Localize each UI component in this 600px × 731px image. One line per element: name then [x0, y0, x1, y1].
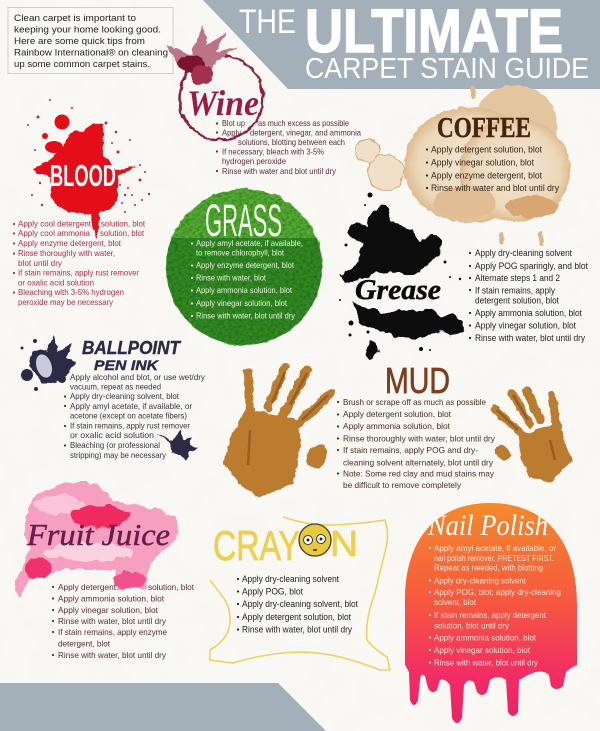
juice tips: solution, blot	[148, 582, 195, 592]
crayon tips: Apply dry-cleaning solvent	[242, 574, 339, 584]
grease tips: Rinse with water, blot until dry	[475, 333, 585, 343]
grass tips: Apply vinegar solution, blot	[196, 298, 288, 308]
footer band	[0, 683, 326, 731]
wine tips: as much excess as possible	[258, 118, 349, 128]
grease tips: detergent solution, blot	[475, 296, 559, 306]
right handprint	[493, 391, 571, 481]
panel: nail polish	[405, 503, 577, 723]
crayon title: N	[330, 523, 358, 564]
crayon tips: Rinse with water, blot until dry	[242, 624, 352, 634]
ink tips: vacuum, repeat as needed	[70, 382, 161, 392]
title: THE	[239, 3, 296, 41]
coffee tips: Apply enzyme detergent, blot	[431, 170, 542, 180]
panel: wine	[166, 25, 361, 176]
polish tips: Apply dry-cleaning solvent	[434, 576, 527, 586]
wine tips: detergent, vinegar, and ammonia	[250, 128, 361, 138]
polish dome with drips	[405, 503, 577, 723]
blood title: BLOOD	[50, 158, 116, 193]
crayon tips: Apply dry-cleaning solvent, blot	[242, 599, 358, 609]
ink tips: or oxalic acid solution	[70, 430, 154, 440]
panel: grass	[165, 189, 323, 348]
coffee tips	[427, 144, 559, 193]
wine tips: Rinse with water and blot until dry	[222, 166, 337, 176]
wine tips	[217, 118, 361, 176]
blood tips: peroxide may be necessary	[18, 297, 114, 307]
coffee tips: Apply detergent solution, blot	[431, 144, 542, 154]
crayon title: CRAY	[213, 522, 300, 569]
polish tips: solvent, blot	[434, 597, 477, 607]
mud tips	[338, 397, 496, 490]
ink tips: acetone (except on acetate fibers)	[70, 410, 187, 420]
polish tips: Apply vinegar solution, blot	[434, 645, 531, 655]
polish title: Nail Polish	[427, 509, 548, 542]
ink title: PEN INK	[94, 357, 159, 373]
wine stain ring and splash	[166, 25, 263, 140]
blood tips: blot until dry	[18, 258, 63, 268]
grass tips: to remove chlorophyll, blot	[196, 248, 285, 258]
grass tips: Rinse with water, blot until dry	[196, 310, 296, 320]
polish tips: Repeat as needed, with blotting	[434, 562, 543, 572]
juice title: Fruit Juice	[26, 517, 170, 552]
grease tips: Apply vinegar solution, blot	[475, 320, 576, 330]
wine tips: Blot up	[222, 118, 245, 128]
grass tips: Apply ammonia solution, blot	[196, 285, 293, 295]
panel: ballpoint pen ink	[20, 334, 206, 461]
grease tips: Alternate steps 1 and 2	[475, 273, 560, 283]
mud tips: be difficult to remove completely	[343, 480, 462, 490]
wine title: Wine	[187, 83, 259, 123]
coffee tips: Rinse with water and blot until dry	[431, 183, 559, 193]
crayon tips: Apply detergent solution, blot	[242, 612, 351, 622]
crayon tips	[238, 574, 358, 634]
panel: blood	[14, 99, 150, 307]
blood tips: solution, blot	[100, 228, 145, 238]
blood tips: solution, blot	[101, 218, 146, 228]
mud tips: If stain remains, apply POG and dry-	[343, 445, 478, 455]
juice tips: Apply ammonia solution, blot	[58, 594, 165, 604]
blood splat	[27, 99, 150, 240]
panel: grease	[338, 192, 588, 359]
ink tips: stripping) may be necessary	[70, 450, 167, 460]
panel: crayon	[210, 517, 390, 670]
mud tips: Rinse thoroughly with water, blot until dry	[343, 434, 496, 444]
blood tips: Apply cool ammonia	[18, 228, 90, 238]
grease tips: Apply ammonia solution, blot	[475, 308, 582, 318]
grass tips	[192, 238, 303, 320]
mud tips: Apply ammonia solution, blot	[343, 421, 451, 431]
grease tips: Apply POG sparingly, and blot	[475, 261, 588, 271]
ink title	[82, 338, 182, 373]
ink tips: Apply amyl acetate, if available, or	[70, 401, 192, 411]
ink tips	[65, 372, 206, 460]
coffee stain	[355, 85, 571, 245]
mud tips: Apply detergent solution, blot	[343, 409, 452, 419]
coffee tips: Apply vinegar solution, blot	[431, 158, 534, 168]
grass tips: Apply amyl acetate, if available,	[196, 238, 303, 248]
ink title: BALLPOINT	[82, 338, 182, 358]
grease splat	[338, 192, 463, 359]
panel: coffee	[355, 85, 571, 245]
left handprint	[224, 367, 331, 496]
juice splash	[13, 481, 178, 596]
juice tips: Apply vinegar solution, blot	[58, 605, 159, 615]
header banner	[203, 0, 600, 89]
intro text box: Rainbow International® on cleaning	[14, 48, 168, 58]
blood tips: Rinse thoroughly with water,	[18, 248, 115, 258]
panel: fruit juice	[13, 481, 195, 660]
juice tips: Rinse with water, blot until dry	[58, 616, 167, 626]
panel: mud	[224, 360, 571, 496]
grease tips	[470, 248, 588, 343]
polish tips	[430, 543, 561, 668]
ink tips: If stain remains, apply rust remover	[70, 420, 190, 430]
polish tips: If stain remains, apply detergent	[434, 610, 547, 620]
panel: grass: GRASS	[205, 195, 282, 246]
grease tips: Apply dry-cleaning solvent	[475, 248, 572, 258]
mud title: MUD	[385, 360, 450, 401]
crayon tips: Apply POG, blot	[242, 586, 303, 596]
small ink splat	[156, 430, 198, 461]
title	[239, 0, 589, 85]
grass tips: Apply enzyme detergent, blot	[196, 260, 295, 270]
wine tips: Apply	[222, 128, 242, 138]
blood tips	[14, 218, 146, 307]
polish tips: Apply POG, blot; apply dry-cleaning	[434, 587, 561, 597]
icon: shocked crayon face	[299, 524, 331, 556]
juice tips: Rinse with water, blot until dry	[58, 650, 167, 660]
intro text box: up some common carpet stains.	[14, 59, 150, 70]
mud tips: Brush or scrape off as much as possible	[343, 397, 486, 407]
blood tips: Apply cool detergent	[18, 218, 92, 228]
blood tips: If stain remains, apply rust remover	[18, 268, 139, 278]
polish tips: Rinse with water, blot until dry	[434, 658, 539, 668]
intro text box: Here are some quick tips from	[14, 36, 145, 47]
intro text box	[8, 8, 173, 74]
blood tips: Bleaching with 3-5% hydrogen	[18, 287, 124, 297]
wine tips: hydrogen peroxide	[222, 156, 286, 166]
juice tips	[53, 582, 195, 660]
intro text box: Clean carpet is important to	[14, 13, 136, 24]
ink tips: Apply alcohol and blot, or use wet/dry	[70, 372, 206, 382]
juice tips: detergent, blot	[58, 638, 111, 648]
polish tips: solution, blot until dry	[434, 620, 510, 630]
mud tips: cleaning solvent alternately, blot until dry	[343, 458, 494, 468]
blood tips: Apply enzyme detergent, blot	[18, 238, 122, 248]
polish tips: nail polish remover. PRETEST FIRST.	[434, 553, 554, 563]
blood tips: or oxalic acid solution	[18, 278, 94, 288]
juice tips: Apply detergent	[58, 582, 117, 592]
ink tips: Bleaching (or professional	[70, 440, 160, 450]
grass tips: Rinse with water, blot	[196, 272, 267, 282]
intro text box: keeping your home looking good.	[14, 24, 161, 36]
crayon outline	[210, 517, 390, 670]
coffee title: COFFEE	[437, 112, 531, 144]
grass circle	[165, 189, 323, 348]
grease tips: If stain remains, apply	[475, 286, 555, 296]
ink tips: Apply dry-cleaning solvent, blot	[70, 391, 180, 401]
polish tips: Apply amyl acetate, if available, or	[434, 543, 556, 553]
wine tips: If necessary, bleach with 3-5%	[222, 146, 324, 156]
grease title: Grease	[355, 274, 441, 306]
polish tips: Apply ammonia solution, blot	[434, 632, 537, 642]
wine tips: solutions, blotting between each	[238, 137, 345, 147]
mud tips: Note: Some red clay and mud stains may	[343, 468, 495, 478]
ink splat	[20, 334, 76, 391]
juice tips: If stain remains, apply enzyme	[58, 627, 167, 637]
